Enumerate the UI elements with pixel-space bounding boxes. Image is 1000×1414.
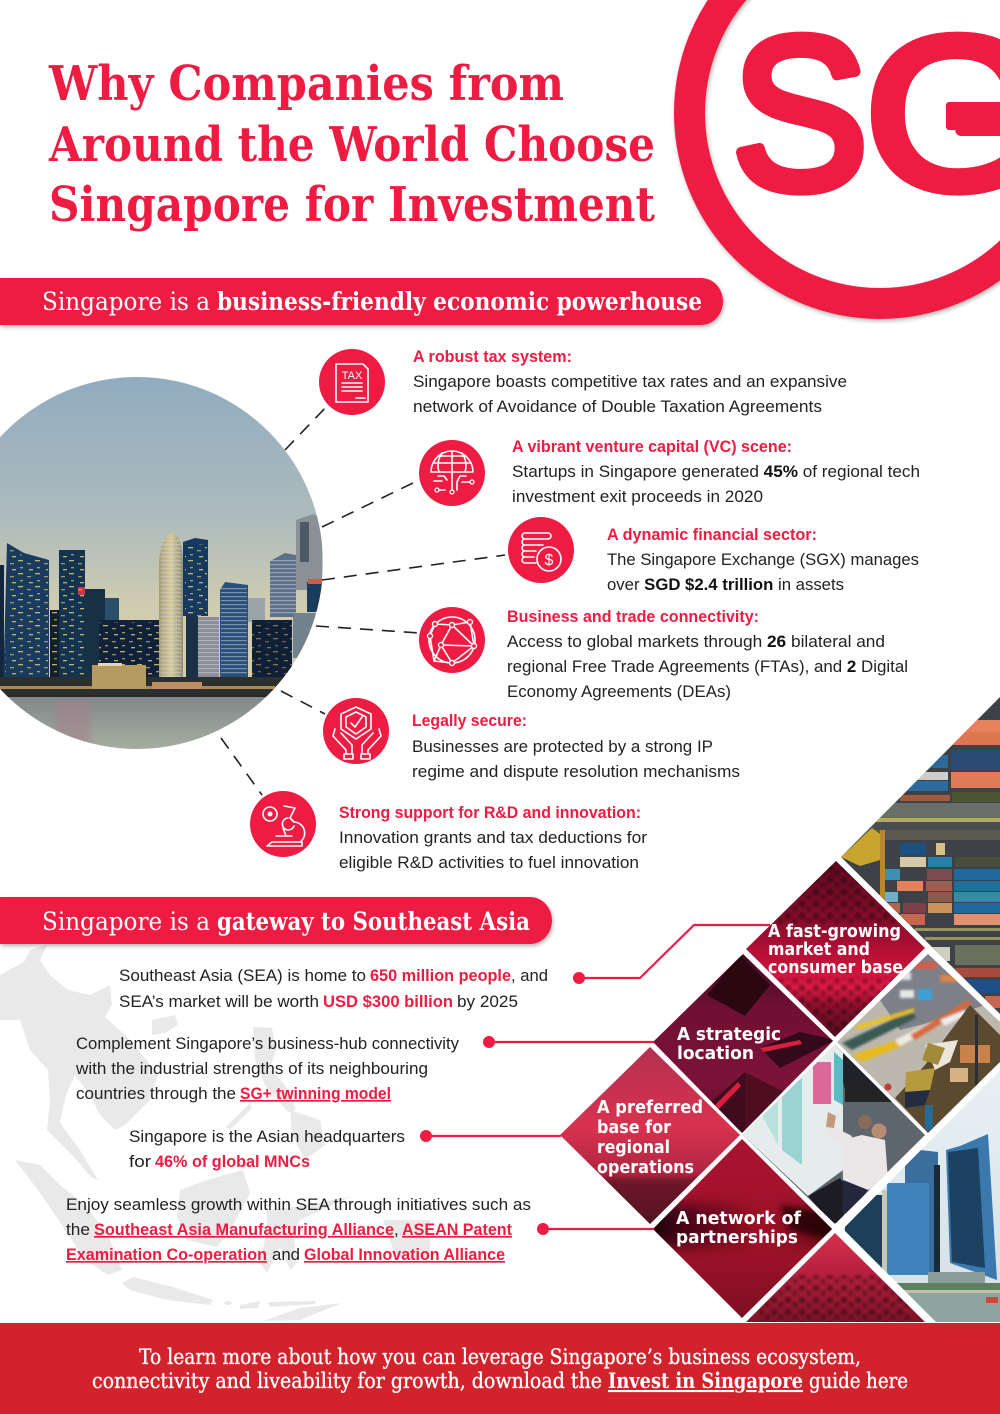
text: SG+ twinning: Complement Singapore’s business-hub connectivity xyxy=(76,1034,459,1053)
text: SG+ twinning: countries through the xyxy=(76,1084,236,1103)
section banner: gateway to Southeast Asia: Singapore is a xyxy=(42,907,210,936)
text: venture capital xyxy=(512,437,920,506)
icon: coins: $ xyxy=(545,552,554,569)
section banner: business-friendly economic powerhouse: Singapore is a xyxy=(42,287,210,316)
connector: location to diamond xyxy=(483,1036,654,1048)
text: venture capital: Startups in Singapore generated 45% of regional tech xyxy=(512,462,920,481)
text: legally secure: Legally secure: xyxy=(412,711,527,730)
title xyxy=(48,56,655,233)
dashed connectors from photo to icons xyxy=(221,405,505,795)
text: seamless growth: Southeast Asia Manufacturing Alliance xyxy=(94,1220,394,1239)
text: robust tax system: network of Avoidance of Double Taxation Agreements xyxy=(413,397,822,416)
text: business and trade connectivity xyxy=(507,607,908,701)
section banner: business-friendly economic powerhouse xyxy=(0,278,723,325)
text: seamless growth: the xyxy=(66,1220,90,1239)
diamond: preferred base for regional operations: base for xyxy=(597,1117,671,1138)
section banner: gateway to Southeast Asia xyxy=(0,897,552,944)
icon: circuit globe xyxy=(419,440,485,506)
text: SEA market xyxy=(119,966,548,1011)
text: SEA market: by 2025 xyxy=(457,992,518,1011)
title: Around the World Choose xyxy=(48,117,655,173)
text: Asian headquarters: Singapore is the Asian headquarters xyxy=(129,1127,405,1146)
photo: Singapore skyline in a circle xyxy=(0,370,340,755)
text: Asian headquarters: 46% of global MNCs xyxy=(155,1152,310,1171)
text: financial sector: The Singapore Exchange (SGX) manages xyxy=(607,550,919,569)
text: business and trade connectivity: Business and trade connectivity: xyxy=(507,607,759,626)
text: legally secure: regime and dispute resolution mechanisms xyxy=(412,762,740,781)
text: seamless growth: Global Innovation Alliance xyxy=(304,1245,505,1264)
diamond: preferred base for regional operations: regional xyxy=(597,1137,670,1158)
photo: city traffic xyxy=(830,950,1000,1140)
icon: shield in hands xyxy=(323,698,389,764)
diamond: fast-growing market and consumer base: market and xyxy=(768,939,870,960)
section banner: gateway to Southeast Asia: gateway to Southeast Asia xyxy=(217,907,530,936)
diamond: strategic location xyxy=(654,954,833,1133)
text: seamless growth: Examination Co-operation xyxy=(66,1245,267,1264)
footer band: guide here xyxy=(809,1369,908,1393)
diamond: fast-growing market and consumer base: A fast-growing xyxy=(768,921,901,942)
SG logo xyxy=(690,0,1000,304)
text: seamless growth xyxy=(66,1195,531,1264)
text: SEA market: 650 million people xyxy=(370,966,511,985)
text: financial sector: A dynamic financial sector: xyxy=(607,525,817,544)
text: financial sector xyxy=(607,525,919,594)
text: seamless growth: Enjoy seamless growth within SEA through initiatives such as xyxy=(66,1195,531,1214)
footer band: To learn more about how you can leverage Singapore’s business ecosystem, xyxy=(139,1345,861,1369)
diamond: preferred base for regional operations: A preferred xyxy=(597,1097,703,1118)
diamond: network of partnerships xyxy=(654,1139,832,1318)
photo: men at a wall display xyxy=(740,1040,930,1230)
icon: network globe xyxy=(419,607,485,673)
title: Why Companies from xyxy=(48,56,564,112)
section banner: business-friendly economic powerhouse: business-friendly economic powerhouse xyxy=(217,287,702,316)
footer band: connectivity and liveability for growth, download the xyxy=(92,1369,602,1393)
diamond: fast-growing market and consumer base: consumer base xyxy=(768,957,903,978)
text: seamless growth: , xyxy=(394,1220,399,1239)
text: R&D and innovation: Innovation grants and tax deductions for xyxy=(339,828,647,847)
text: SEA market: Southeast Asia (SEA) is home to xyxy=(119,966,366,985)
diamond: strategic location: A strategic xyxy=(677,1024,781,1045)
text: business and trade connectivity: Economy Agreements (DEAs) xyxy=(507,682,731,701)
diamond: network of partnerships: partnerships xyxy=(676,1227,798,1248)
connector: market to diamond xyxy=(573,925,770,984)
text: SEA market: SEA’s market will be worth xyxy=(119,992,319,1011)
text: SEA market: , and xyxy=(511,966,548,985)
photo: skyscrapers xyxy=(840,1060,1000,1325)
background world map: Southeast Asia xyxy=(0,945,430,1321)
text: SG+ twinning xyxy=(75,1034,459,1103)
text: Asian headquarters xyxy=(129,1127,405,1171)
text: legally secure: Businesses are protected by a strong IP xyxy=(412,737,713,756)
text: legally secure xyxy=(412,711,740,781)
icon: tax document xyxy=(319,349,385,415)
text: business and trade connectivity: Access to global markets through 26 bilateral and xyxy=(507,632,885,651)
connector: partnerships to diamond xyxy=(537,1223,654,1235)
text: seamless growth: and xyxy=(272,1245,300,1264)
diamond: strategic location: location xyxy=(677,1043,754,1064)
title: Singapore for Investment xyxy=(49,177,655,233)
text: venture capital: investment exit proceeds in 2020 xyxy=(512,487,763,506)
icon: coins xyxy=(508,517,574,583)
text: business and trade connectivity: regional Free Trade Agreements (FTAs), and 2 Digital xyxy=(507,657,908,676)
text: SEA market: USD $300 billion xyxy=(323,992,453,1011)
diamond: network of partnerships: A network of xyxy=(676,1208,801,1229)
footer band: Invest in Singapore xyxy=(608,1368,803,1393)
text: financial sector: over SGD $2.4 trillion in assets xyxy=(607,575,844,594)
text: SG+ twinning: with the industrial strengths of its neighbouring xyxy=(75,1059,428,1078)
diamond: preferred base for regional operations xyxy=(555,1045,745,1228)
text: robust tax system: Singapore boasts competitive tax rates and an expansive xyxy=(413,372,847,391)
text: R&D and innovation: Strong support for R&D and innovation: xyxy=(339,803,641,822)
text: R&D and innovation: eligible R&D activities to fuel innovation xyxy=(339,853,639,872)
text: Asian headquarters: for xyxy=(129,1152,151,1171)
text: seamless growth: ASEAN Patent xyxy=(402,1220,512,1239)
text: R&D and innovation xyxy=(339,803,647,872)
text: venture capital: A vibrant venture capital (VC) scene: xyxy=(512,437,792,456)
footer band xyxy=(0,1323,1000,1414)
photo: container port xyxy=(835,695,1000,1020)
icon: microscope xyxy=(250,791,316,857)
diamond: fast-growing market and consumer base xyxy=(746,861,925,1037)
diamond: bottom red city xyxy=(746,1233,925,1322)
connector: base to diamond xyxy=(420,1130,561,1142)
text: robust tax system xyxy=(413,347,847,416)
diamond: preferred base for regional operations: operations xyxy=(597,1157,694,1178)
icon: tax document: TAX xyxy=(342,370,363,382)
text: robust tax system: A robust tax system: xyxy=(413,347,572,366)
text: SG+ twinning: SG+ twinning model xyxy=(240,1084,391,1103)
